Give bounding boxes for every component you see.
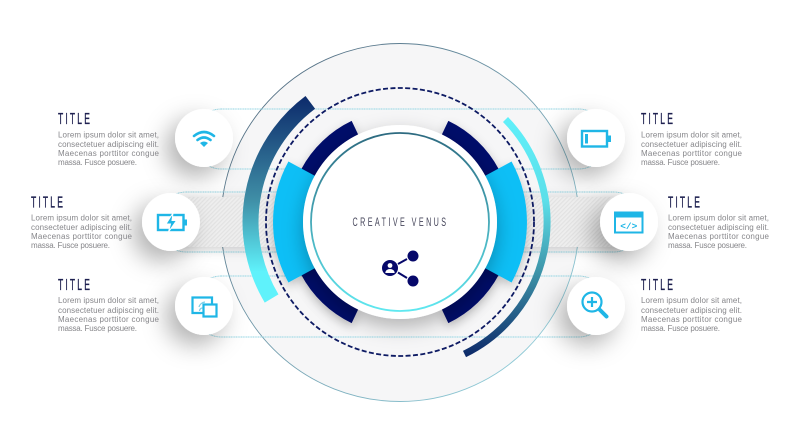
- text block: left bottom: [58, 276, 160, 333]
- text block: right bottom: Lorem ipsum dolor sit amet,: [641, 296, 742, 305]
- text block: right middle: [668, 194, 770, 250]
- text block: left bottom: Lorem ipsum dolor sit amet,: [58, 296, 159, 305]
- text block: left bottom: consectetuer adipiscing elit.: [58, 306, 159, 315]
- text block: left top: [58, 110, 160, 167]
- text block: right middle: TITLE: [668, 194, 700, 211]
- text block: left top: consectetuer adipiscing elit.: [58, 140, 159, 149]
- node: code window: </>: [620, 221, 638, 232]
- center label: CREATIVE VENUS: [352, 216, 446, 230]
- text block: left top: Lorem ipsum dolor sit amet,: [58, 130, 159, 140]
- text block: left middle: Maecenas porttitor congue: [31, 232, 133, 241]
- central hatched band: [175, 197, 625, 247]
- node: low battery: [567, 109, 625, 167]
- text block: right middle: massa. Fusce posuere.: [668, 241, 747, 250]
- icon: share: [382, 250, 418, 286]
- text block: left middle: massa. Fusce posuere.: [31, 241, 110, 250]
- text block: left top: massa. Fusce posuere.: [58, 158, 137, 167]
- text block: left middle: [31, 194, 133, 250]
- node: charging battery: [142, 193, 200, 251]
- navy segments: [308, 128, 492, 316]
- text block: right middle: consectetuer adipiscing elit.: [668, 223, 769, 232]
- text block: right bottom: massa. Fusce posuere.: [641, 324, 720, 333]
- node: wifi: [175, 109, 233, 167]
- text block: left bottom: TITLE: [58, 276, 90, 294]
- cyan segments: [288, 169, 512, 275]
- right gradient arc: [464, 120, 547, 354]
- node: search: [567, 277, 625, 335]
- left gradient arc: [251, 102, 310, 299]
- text block: left top: TITLE: [58, 110, 90, 128]
- text block: left top: Maecenas porttitor congue: [58, 149, 160, 158]
- text block: right middle: Lorem ipsum dolor sit amet,: [668, 214, 769, 222]
- text block: right top: Maecenas porttitor congue: [641, 149, 743, 158]
- outer circle: [221, 44, 579, 402]
- text block: left bottom: massa. Fusce posuere.: [58, 324, 137, 333]
- center inner ring: [311, 133, 489, 311]
- text block: right top: massa. Fusce posuere.: [641, 158, 720, 167]
- text block: right top: consectetuer adipiscing elit.: [641, 140, 742, 149]
- text block: left middle: consectetuer adipiscing elit.: [31, 223, 132, 232]
- connector outlines: [160, 109, 640, 337]
- text block: left middle: TITLE: [31, 194, 63, 211]
- node: code window: [600, 193, 658, 251]
- text block: right bottom: Maecenas porttitor congue: [641, 315, 743, 324]
- text block: right top: Lorem ipsum dolor sit amet,: [641, 130, 742, 140]
- dashed circle: [266, 88, 534, 356]
- text block: right bottom: TITLE: [641, 276, 673, 294]
- text block: left middle: Lorem ipsum dolor sit amet,: [31, 214, 132, 222]
- center disc: [303, 125, 497, 319]
- text block: right top: TITLE: [641, 110, 673, 128]
- text block: right middle: Maecenas porttitor congue: [668, 232, 770, 241]
- text block: left bottom: Maecenas porttitor congue: [58, 315, 160, 324]
- text block: right bottom: [641, 276, 743, 333]
- text block: right top: [641, 110, 743, 167]
- node: cast screens: [175, 277, 233, 335]
- text block: right bottom: consectetuer adipiscing elit.: [641, 306, 742, 315]
